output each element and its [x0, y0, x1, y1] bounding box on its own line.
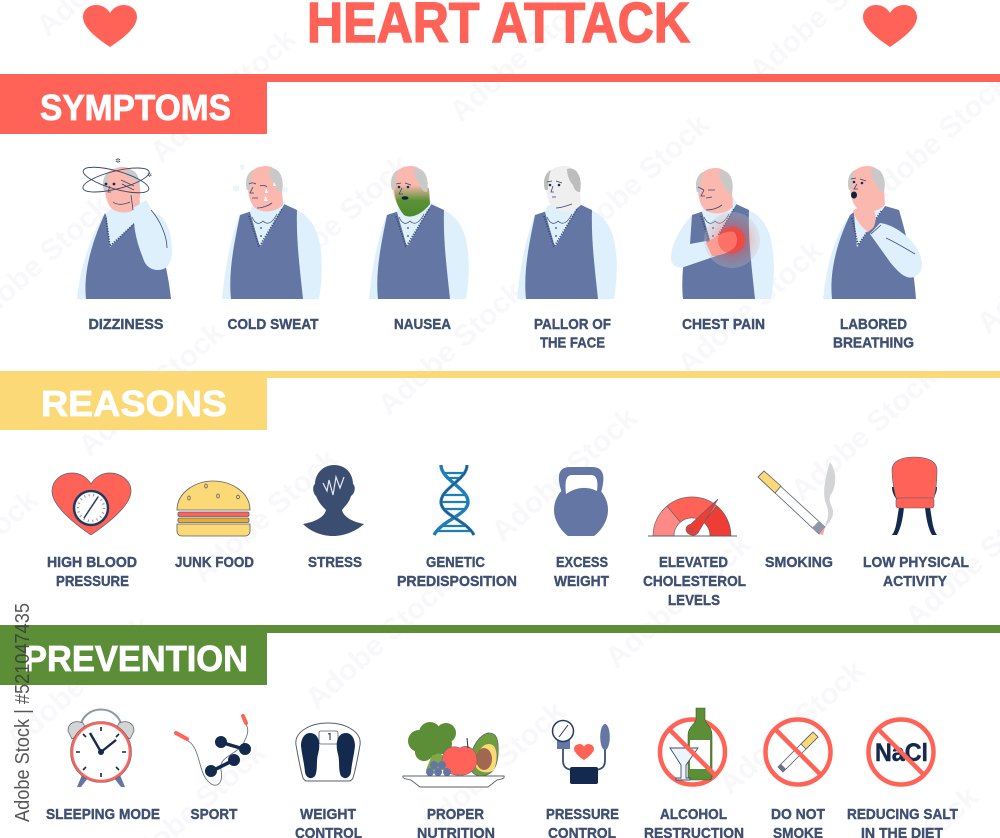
label — [833, 316, 914, 352]
label: SLEEPING MODE — [46, 806, 160, 823]
icon: blood pressure heart — [52, 473, 131, 535]
label: SPORT — [190, 806, 238, 823]
label — [643, 554, 746, 609]
label: PROPER — [427, 806, 484, 823]
label: DO NOT — [771, 806, 825, 823]
label: HIGH BLOOD — [47, 554, 137, 571]
prevention heading: PREVENTION — [24, 638, 248, 679]
label — [554, 554, 609, 590]
label: PALLOR OF — [534, 316, 611, 333]
icon: jump rope and dumbbells — [176, 716, 251, 785]
label — [546, 806, 619, 838]
icon: cigarette — [758, 462, 835, 535]
figure: cold sweat: ❄ — [232, 184, 240, 195]
figure: cold sweat: ❄ — [239, 163, 246, 172]
figure: labored breathing — [823, 166, 922, 299]
icon: dna — [434, 465, 474, 535]
figure: dizziness — [77, 157, 172, 299]
reasons band — [0, 371, 1000, 430]
label: LOW PHYSICAL — [863, 554, 969, 571]
icon: left heart — [83, 5, 137, 47]
icon: stress head — [303, 465, 364, 536]
symptoms heading: SYMPTOMS — [40, 87, 231, 128]
label: WEIGHT — [300, 806, 356, 823]
label: DIZZINESS — [88, 316, 164, 333]
symptoms band — [0, 74, 1000, 134]
label: WEIGHT — [554, 573, 609, 590]
label: PREDISPOSITION — [397, 573, 517, 590]
figure: dizziness: ✲ — [115, 157, 121, 165]
label: LABORED — [840, 316, 907, 333]
label: GENETIC — [426, 554, 485, 571]
label: BREATHING — [833, 334, 914, 352]
label: CHOLESTEROL — [643, 573, 746, 590]
label — [295, 806, 362, 838]
icon: no smoking — [766, 720, 830, 784]
icon: kettlebell — [554, 467, 608, 536]
icon: armchair — [892, 457, 937, 535]
label — [47, 554, 137, 590]
section: reasons — [0, 371, 1000, 609]
label: COLD SWEAT — [228, 316, 318, 333]
label: CHEST PAIN — [682, 316, 765, 333]
figure: cold sweat: ❄ — [281, 186, 289, 196]
label — [417, 806, 495, 838]
icon: burger — [177, 481, 250, 536]
reasons heading: REASONS — [41, 383, 227, 424]
icon: no salt: NaCl — [875, 739, 928, 767]
icon: weighing scale — [296, 723, 360, 781]
label: EXCESS — [556, 554, 608, 571]
label — [397, 554, 517, 590]
label: ACTIVITY — [883, 573, 947, 590]
prevention band — [0, 625, 1000, 685]
figure: chest pain — [671, 168, 774, 299]
icon: right heart — [863, 5, 917, 47]
figure: cold sweat — [222, 163, 322, 299]
label: NAUSEA — [394, 316, 451, 333]
label: PRESSURE — [546, 806, 619, 823]
label: JUNK FOOD — [175, 554, 254, 571]
label — [771, 806, 825, 838]
label: LEVELS — [668, 592, 720, 609]
figure: nausea — [369, 166, 469, 299]
figure: pallor of the face — [517, 166, 617, 299]
label — [847, 806, 958, 838]
label — [863, 554, 969, 590]
icon: no alcohol — [660, 708, 725, 784]
label — [534, 316, 611, 352]
section: symptoms — [0, 74, 1000, 352]
label: THE FACE — [540, 334, 605, 352]
label: ALCOHOL — [660, 806, 727, 823]
icon: cholesterol gauge — [648, 497, 737, 536]
label: SMOKING — [765, 554, 833, 571]
label: PRESSURE — [56, 573, 129, 590]
label: ELEVATED — [659, 554, 728, 571]
icon: healthy food plate — [403, 722, 504, 787]
icon: blood pressure monitor — [552, 720, 610, 784]
icon: no salt — [868, 720, 934, 784]
label — [644, 806, 744, 838]
icon: alarm clock — [68, 710, 134, 787]
label: REDUCING SALT — [847, 806, 958, 823]
figure: dizziness: ✲ — [147, 172, 152, 179]
section: prevention — [0, 625, 1000, 838]
label: STRESS — [308, 554, 362, 571]
stock watermark id: Adobe Stock | #521047435 — [12, 603, 34, 822]
